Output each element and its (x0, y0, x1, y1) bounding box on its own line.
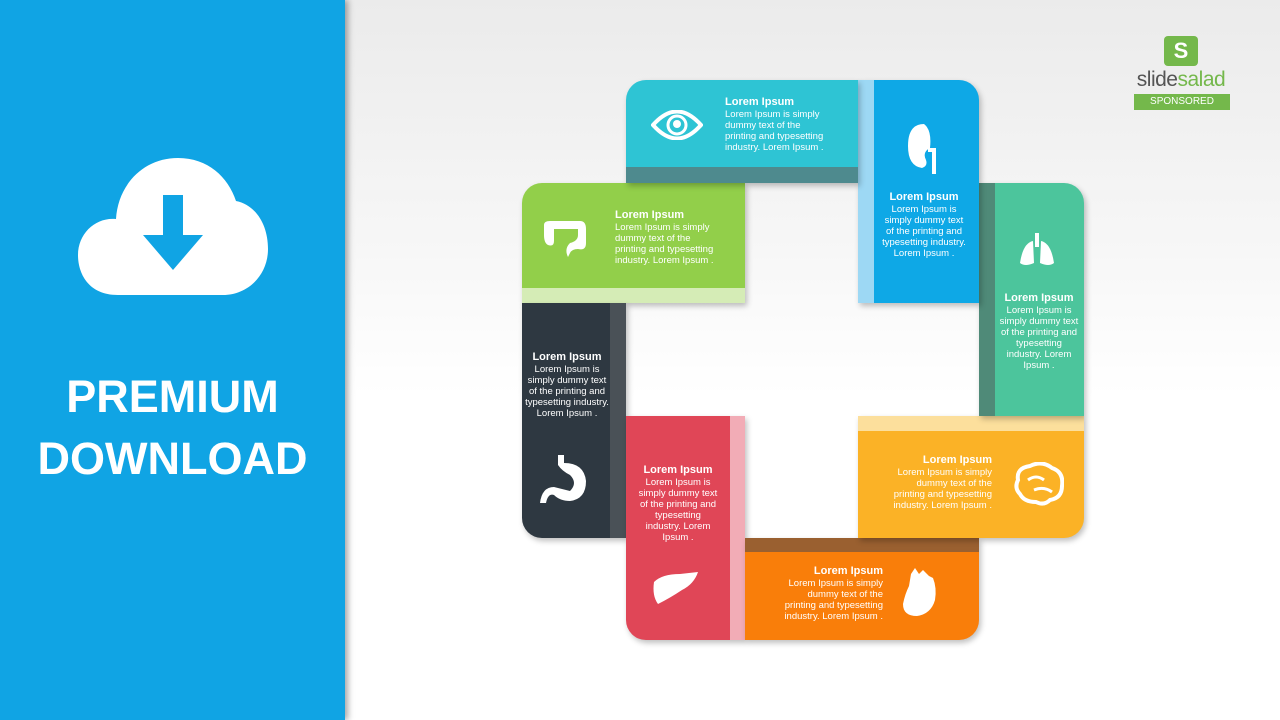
panel: liver (red): Lorem Ipsum (643, 464, 713, 476)
heading: premium download: PREMIUM (66, 371, 279, 422)
panel: eye (cyan): Lorem Ipsum (725, 96, 794, 108)
icon: heart (903, 568, 936, 616)
logo: slidesalad (1134, 36, 1230, 110)
panel: liver (red): Lorem Ipsum is simply dummy text of the printing and typesetting industry. Lorem Ipsum . (639, 477, 717, 543)
panel: kidney (blue): Lorem Ipsum is simply dummy text of the printing and typesetting industry. Lorem Ipsum . (882, 204, 966, 259)
panel: lungs (teal green): Lorem Ipsum is simply dummy text of the printing and typesetting industry. Lorem Ipsum . (1000, 305, 1078, 371)
icon: cloud download (78, 158, 268, 295)
icon: eye (651, 110, 703, 140)
icon: brain (1014, 462, 1064, 506)
logo: slidesalad: slidesalad (1137, 68, 1225, 91)
icon: lungs (1020, 233, 1054, 265)
logo: slidesalad: S (1174, 38, 1188, 63)
panel: heart (orange): Lorem Ipsum is simply dummy text of the printing and typesetting industry. Lorem Ipsum . (784, 578, 883, 622)
panel: colon (green): Lorem Ipsum (615, 209, 684, 221)
panel: stomach (dark) (522, 303, 626, 538)
icon: stomach (540, 455, 586, 503)
panel: eye (cyan): Lorem Ipsum is simply dummy text of the printing and typesetting industry. Lorem Ipsum . (725, 109, 824, 153)
icon: liver (654, 572, 698, 604)
panel: brain (yellow): Lorem Ipsum (923, 454, 992, 466)
panel: brain (yellow): Lorem Ipsum is simply dummy text of the printing and typesetting industry. Lorem Ipsum . (893, 467, 992, 511)
panel: stomach (dark): Lorem Ipsum is simply dummy text of the printing and typesetting industry. Lorem Ipsum . (525, 364, 609, 419)
panel: stomach (dark): Lorem Ipsum (532, 351, 602, 363)
heading: premium download: DOWNLOAD (38, 433, 307, 484)
panel: kidney (blue) (858, 80, 979, 303)
panel: colon (green) (522, 183, 745, 303)
panel: liver (red) (626, 416, 745, 640)
left panel: premium download (0, 0, 345, 720)
logo: slidesalad: SPONSORED (1150, 96, 1214, 107)
heading: premium download (38, 371, 307, 484)
panel: heart (orange) (745, 538, 979, 640)
panel: eye (cyan) (626, 80, 858, 183)
panel: lungs (teal green) (979, 183, 1084, 416)
panel: brain (yellow) (858, 416, 1084, 538)
panel: kidney (blue): Lorem Ipsum (889, 191, 959, 203)
icon: kidney (908, 124, 936, 174)
panel: colon (green): Lorem Ipsum is simply dummy text of the printing and typesetting industry. Lorem Ipsum . (615, 222, 714, 266)
icon: colon (544, 221, 586, 257)
panel: lungs (teal green): Lorem Ipsum (1004, 292, 1074, 304)
panel: heart (orange): Lorem Ipsum (814, 565, 883, 577)
